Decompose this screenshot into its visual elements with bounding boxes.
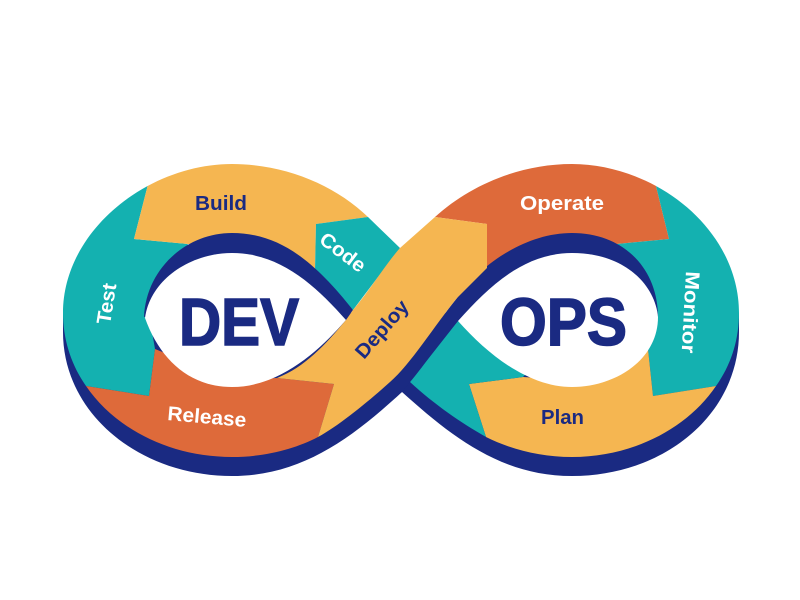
navy 3D base of the infinity loop bbox=[63, 313, 739, 476]
segment: lower teal connector bbox=[410, 321, 530, 437]
segment: Operate bbox=[435, 164, 669, 268]
segment: Build bbox=[134, 164, 368, 270]
label: Operate: Operate bbox=[520, 193, 604, 215]
segment: Deploy bbox=[277, 217, 487, 437]
label: Code: Code bbox=[315, 228, 370, 277]
segment: Code bbox=[315, 217, 400, 310]
label: Plan: Plan bbox=[541, 407, 584, 429]
eye: DEV opening bbox=[145, 253, 346, 387]
heading: OPS: OPS bbox=[500, 285, 627, 360]
segment: Test bbox=[63, 186, 188, 396]
segment: Plan bbox=[469, 349, 716, 457]
label: Deploy: Deploy bbox=[351, 295, 414, 363]
heading: DEV: DEV bbox=[179, 285, 299, 360]
navy inner band: OPS bbox=[390, 233, 658, 400]
label: Build: Build bbox=[195, 193, 247, 215]
label: Monitor: Monitor bbox=[677, 271, 703, 354]
segment: Release bbox=[86, 349, 334, 457]
segment: Monitor bbox=[617, 186, 739, 396]
eye: OPS opening bbox=[458, 253, 658, 387]
navy inner band: DEV bbox=[144, 233, 353, 320]
label: Test: Test bbox=[93, 282, 121, 326]
label: Release: Release bbox=[167, 403, 247, 432]
